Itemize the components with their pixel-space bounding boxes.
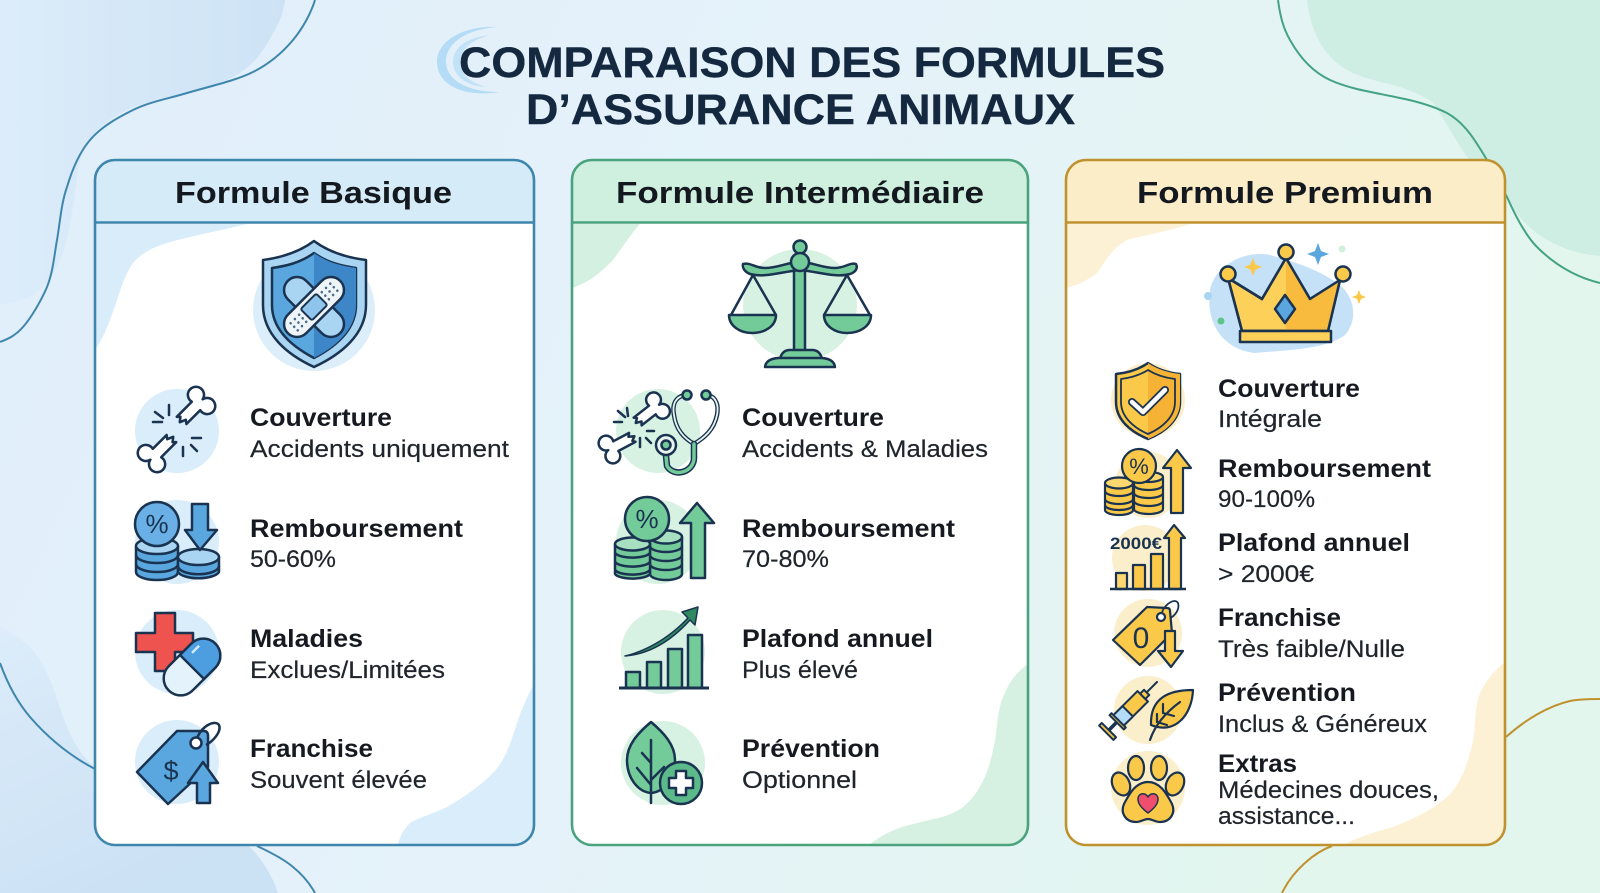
panel: Formule Basique (95, 160, 536, 847)
icon: shield with bandage (253, 241, 375, 371)
row: Remboursement (1105, 449, 1432, 518)
text: Couverture (250, 404, 392, 432)
text (742, 625, 933, 684)
text: Accidents uniquement (250, 436, 509, 463)
icon: coins and down arrow: % (145, 509, 169, 539)
icon: balance scale (729, 240, 871, 367)
icon: gold coins and up arrow: % (1129, 454, 1149, 479)
icon: rising bar chart (619, 607, 709, 694)
text (250, 404, 509, 463)
text (1218, 604, 1405, 663)
text (250, 625, 445, 684)
text (250, 515, 464, 573)
text: Plafond annuel (742, 625, 933, 653)
text: 50-60% (250, 546, 336, 573)
text: Exclues/Limitées (250, 657, 445, 684)
heading: Formule Basique (175, 175, 452, 210)
text (250, 735, 427, 794)
text: Prévention (742, 735, 880, 763)
row: Plafond annuel (1110, 525, 1410, 591)
icon: broken bone (134, 383, 219, 476)
icon: gold shield with check (1111, 363, 1185, 439)
row: Franchise (1113, 599, 1405, 667)
row: Prévention (621, 721, 880, 805)
row: Couverture (134, 383, 509, 476)
text: Accidents & Maladies (742, 436, 988, 463)
icon: broken bone and stethoscope (596, 389, 718, 473)
text: Optionnel (742, 767, 857, 794)
row: Remboursement (615, 497, 956, 584)
text: Très faible/Nulle (1218, 636, 1405, 663)
panel: Formule Premium (1066, 160, 1507, 847)
icon: price tag and up arrow: $ (163, 756, 179, 786)
row: Franchise (135, 720, 427, 804)
title: COMPARAISON DES FORMULES (459, 39, 1165, 87)
text: Couverture (1218, 375, 1360, 403)
text: Maladies (250, 625, 363, 653)
icon: gold bar chart with 2000€: 2000€ (1110, 534, 1163, 553)
text: Prévention (1218, 679, 1356, 707)
text (1218, 679, 1427, 738)
icon: gold coins and up arrow (1105, 449, 1191, 518)
icon: gold tag and down arrow (1113, 599, 1183, 667)
text: > 2000€ (1218, 561, 1315, 588)
row: Remboursement (135, 500, 464, 584)
row: Extras (1108, 750, 1439, 830)
title (437, 27, 1165, 134)
text (1218, 750, 1439, 830)
text: 70-80% (742, 546, 829, 573)
icon: leaf with plus (621, 721, 705, 805)
icon: cross and pill (135, 610, 227, 702)
text: Intégrale (1218, 406, 1322, 433)
panel: Formule Intermédiaire (572, 160, 1030, 847)
icon: coins and up arrow: % (635, 504, 659, 534)
heading: Formule Intermédiaire (616, 175, 984, 210)
row: Plafond annuel (619, 607, 933, 694)
title swirl (437, 27, 500, 93)
text: Médecines douces, (1218, 777, 1439, 804)
text (1218, 529, 1410, 588)
icon: coins and up arrow (615, 497, 714, 584)
title: D’ASSURANCE ANIMAUX (526, 86, 1075, 134)
icon: syringe and leaf (1099, 675, 1193, 744)
icon: gold bar chart with 2000€ (1110, 525, 1186, 591)
row: Prévention (1099, 675, 1427, 744)
icon: price tag and up arrow (135, 720, 220, 804)
row: Maladies (135, 610, 445, 702)
text: Plafond annuel (1218, 529, 1410, 557)
text (742, 515, 956, 573)
text: Inclus & Généreux (1218, 711, 1427, 738)
row: Couverture (596, 389, 988, 473)
text: Couverture (742, 404, 884, 432)
text: Plus élevé (742, 657, 858, 684)
text: Extras (1218, 750, 1297, 778)
text: assistance... (1218, 803, 1355, 830)
text (1218, 375, 1360, 433)
icon: coins and down arrow (135, 500, 219, 584)
text: Franchise (1218, 604, 1341, 632)
text (742, 735, 880, 794)
icon: crown with sparkles (1204, 243, 1366, 353)
icon: paw with heart (1108, 751, 1188, 825)
heading: Formule Premium (1137, 175, 1433, 210)
text: 90-100% (1218, 486, 1315, 513)
text (1218, 455, 1432, 513)
text: Remboursement (1218, 455, 1432, 483)
text: Remboursement (742, 515, 956, 543)
text: Remboursement (250, 515, 464, 543)
text (742, 404, 988, 463)
row: Couverture (1111, 363, 1360, 439)
icon: gold tag and down arrow: 0 (1133, 622, 1149, 655)
text: Souvent élevée (250, 767, 427, 794)
text: Franchise (250, 735, 373, 763)
